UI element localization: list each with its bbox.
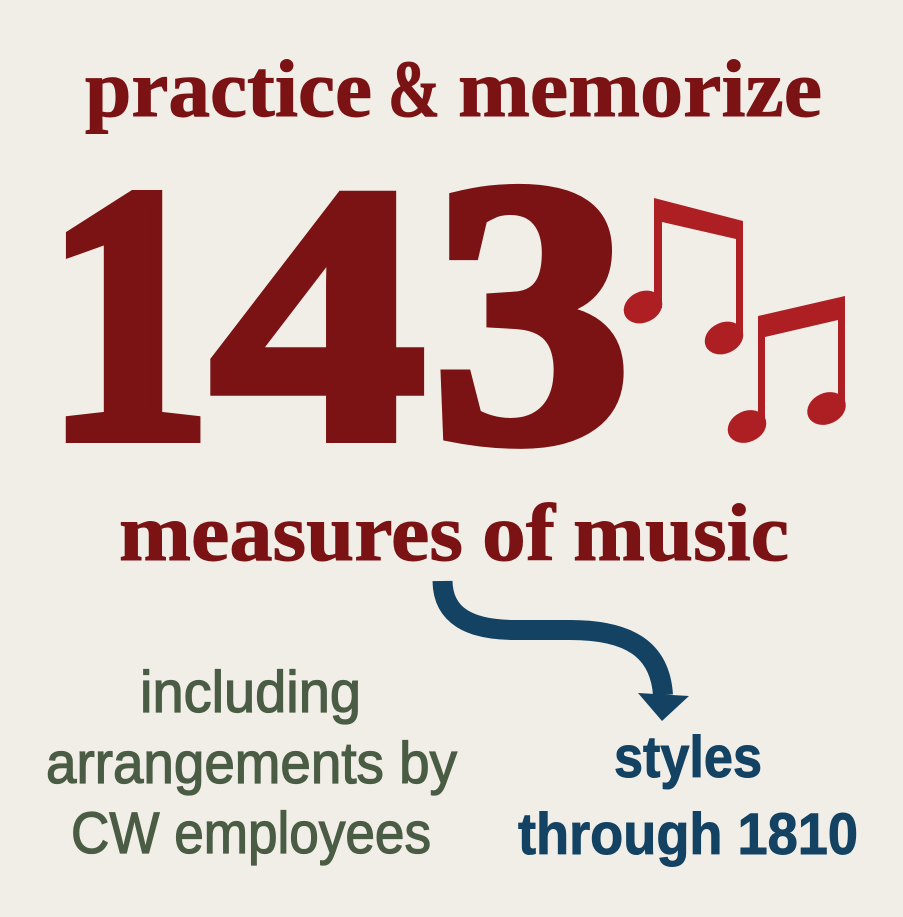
heading: practice & memorize: practice bbox=[85, 43, 372, 134]
heading: practice & memorize bbox=[85, 43, 822, 134]
text block: including arrangements: arrangements by bbox=[46, 731, 457, 796]
subheading: measures of music: music bbox=[573, 487, 789, 578]
big number: 143: 4 bbox=[212, 112, 425, 516]
text block: styles through 1810: styles bbox=[614, 725, 762, 790]
text block: styles through 1810: through 1810 bbox=[518, 802, 858, 867]
big number: 143: 1 bbox=[44, 111, 212, 516]
heading: practice & memorize: & bbox=[388, 43, 440, 134]
text block: including arrangements: CW employees bbox=[71, 801, 431, 866]
text block: including arrangements: including bbox=[140, 660, 361, 725]
icon: right beamed notes bbox=[722, 296, 851, 449]
subheading: measures of music: of bbox=[482, 487, 557, 578]
subheading: measures of music: measures bbox=[119, 487, 463, 578]
subheading: measures of music bbox=[119, 487, 789, 578]
icon: left beamed notes bbox=[618, 198, 749, 361]
arrow: curved arrow to styles bbox=[442, 581, 689, 721]
heading: practice & memorize: memorize bbox=[458, 43, 822, 134]
big number: 143: 3 bbox=[432, 104, 631, 521]
icon: music notes bbox=[618, 198, 851, 449]
big number: 143 bbox=[44, 104, 631, 521]
text block: styles through 1810 bbox=[518, 725, 858, 867]
text block: including arrangements bbox=[46, 660, 457, 866]
